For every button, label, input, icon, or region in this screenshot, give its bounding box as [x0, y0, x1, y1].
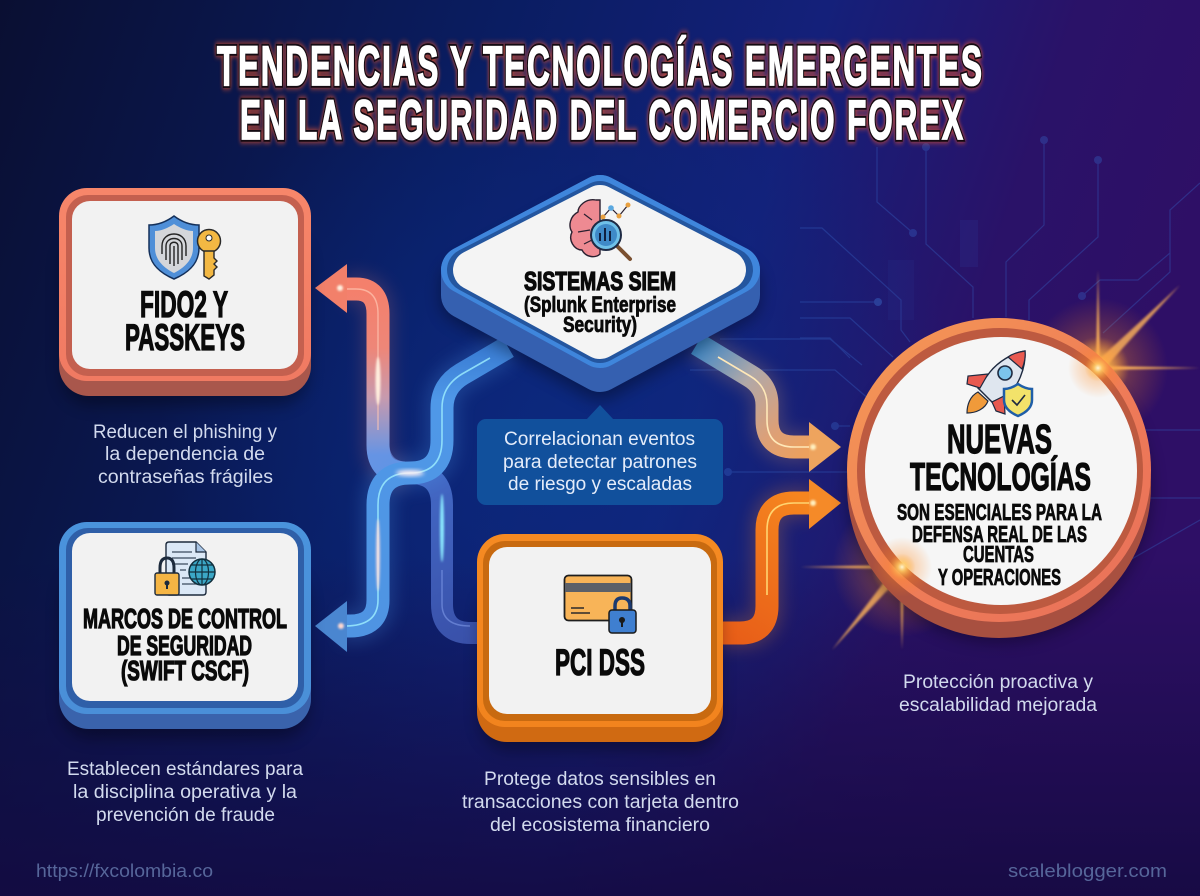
connector arrow to SWIFT CSCF: [315, 347, 508, 652]
text: SWIFT description: Establecen estándares para: [67, 759, 303, 780]
panel: FIDO2 y Passkeys: [59, 188, 311, 405]
panel: Sistemas SIEM: [465, 199, 736, 376]
text: circle subheading: [897, 499, 1102, 590]
title: EN LA SEGURIDAD DEL COMERCIO FOREX: [240, 88, 963, 151]
text: FIDO2 description: [93, 422, 277, 488]
heading: MARCOS DE CONTROL: [83, 603, 287, 634]
panel: PCI DSS: [477, 534, 723, 750]
text: FIDO2 description: Reducen el phishing y: [93, 422, 277, 443]
heading: [524, 266, 676, 337]
heading: [83, 603, 287, 686]
icon: brain, magnifier and trend: [570, 200, 630, 259]
flare highlights on rim: [872, 338, 1128, 597]
heading: Security): [563, 312, 637, 337]
heading: NUEVAS: [947, 416, 1052, 462]
text: circle subheading: DEFENSA REAL DE LAS: [912, 521, 1087, 547]
title: EN LA SEGURIDAD DEL COMERCIO FOREX: [240, 88, 963, 151]
text: FIDO2 description: contraseñas frágiles: [98, 467, 273, 488]
text: Nuevas Tecnologías description: escalabilidad mejorada: [899, 695, 1097, 716]
connector arrow from PCI DSS to Nuevas Tecnologías: [720, 479, 841, 633]
heading: FIDO2 Y: [140, 284, 228, 325]
heading: (SWIFT CSCF): [121, 655, 249, 686]
icon: rocket with shield: [967, 351, 1032, 416]
flares behind circle: [800, 270, 1200, 650]
icon: credit card and lock: [564, 576, 636, 633]
title: TENDENCIAS Y TECNOLOGÍAS EMERGENTES: [217, 34, 982, 97]
heading: DE SEGURIDAD: [117, 630, 252, 661]
text: PCI DSS description: [462, 769, 739, 836]
heading: SISTEMAS SIEM: [524, 266, 676, 296]
callout: SIEM description: [477, 405, 723, 505]
heading: [125, 284, 245, 358]
connector arrow to FIDO2: [315, 264, 405, 473]
title: TENDENCIAS Y TECNOLOGÍAS EMERGENTES: [217, 34, 982, 97]
callout: SIEM description: para detectar patrones: [503, 452, 697, 473]
title: EN LA SEGURIDAD DEL COMERCIO FOREX: [240, 88, 963, 151]
text: SWIFT description: la disciplina operativa y la: [73, 782, 297, 803]
icon: document, lock and globe: [155, 542, 215, 595]
text: SWIFT description: prevención de fraude: [96, 805, 275, 826]
heading: PASSKEYS: [125, 317, 245, 358]
heading: (Splunk Enterprise: [524, 292, 676, 317]
text: Nuevas Tecnologías description: Protección proactiva y: [903, 672, 1094, 693]
panel: Nuevas Tecnologías: [847, 318, 1151, 642]
connector: dark band to PCI DSS: [378, 440, 480, 633]
footer right url: scaleblogger.com: [1008, 861, 1167, 881]
text: circle subheading: SON ESENCIALES PARA LA: [897, 499, 1102, 525]
text: FIDO2 description: la dependencia de: [105, 444, 265, 465]
callout: SIEM description: de riesgo y escaladas: [508, 474, 692, 495]
text: PCI DSS description: Protege datos sensibles en: [484, 769, 716, 790]
text: PCI DSS description: del ecosistema financiero: [490, 815, 710, 836]
text: Nuevas Tecnologías description: [899, 672, 1097, 716]
heading: [910, 416, 1091, 499]
text: SWIFT description: [67, 759, 303, 826]
text: circle subheading: Y OPERACIONES: [938, 564, 1061, 590]
icon: shield with fingerprint and key: [149, 216, 220, 279]
title: TENDENCIAS Y TECNOLOGÍAS EMERGENTES: [217, 34, 982, 97]
title: [217, 34, 982, 151]
text: PCI DSS description: transacciones con tarjeta dentro: [462, 792, 739, 813]
callout: SIEM description: Correlacionan eventos: [504, 429, 695, 450]
panel: Marcos de control: [59, 522, 311, 738]
heading: PCI DSS: [555, 642, 645, 683]
circuit lines background: [690, 136, 1200, 560]
connector arrow from SIEM to Nuevas Tecnologías: [697, 344, 841, 472]
heading: TECNOLOGÍAS: [910, 455, 1091, 499]
footer left url: https://fxcolombia.co: [36, 861, 213, 881]
text: circle subheading: CUENTAS: [963, 541, 1034, 567]
